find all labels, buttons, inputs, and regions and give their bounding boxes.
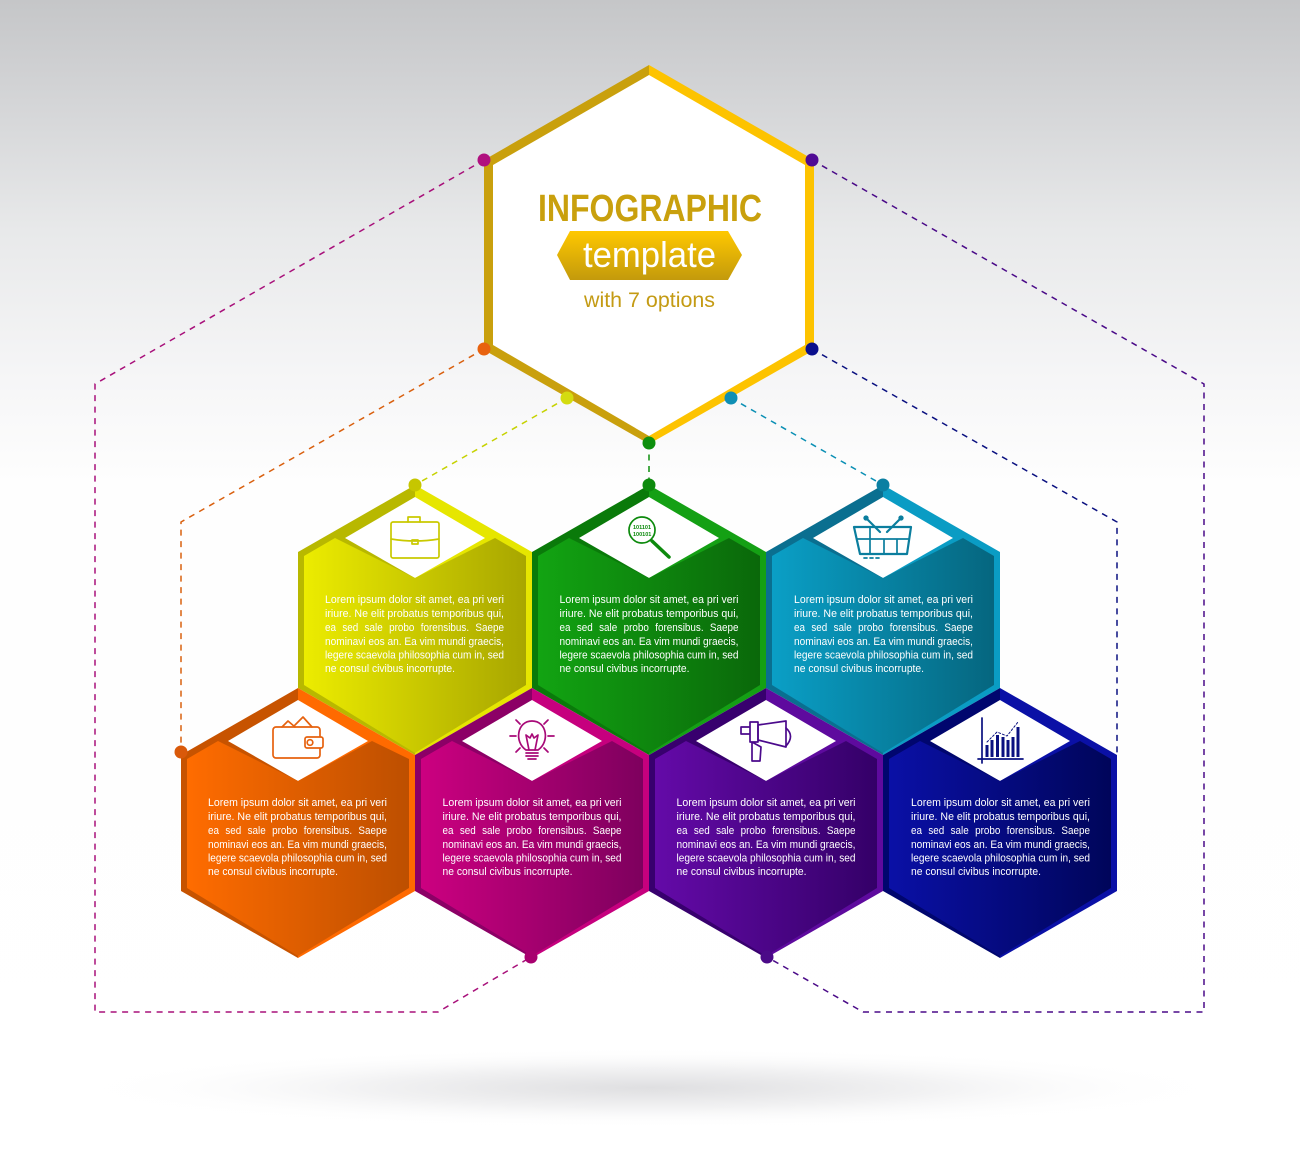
orange text: ea sed sale probo forensibus. Saepe — [208, 825, 387, 837]
icon: light bulb — [510, 720, 554, 759]
panel: navy option — [883, 688, 1117, 958]
dashed connectors — [95, 160, 1204, 1012]
purple text: iriure. Ne elit probatus temporibus qui, — [676, 811, 856, 823]
orange text: legere scaevola philosophia cum in, sed — [208, 852, 387, 864]
purple text: nominavi eos an. Ea vim mundi graecis, — [676, 839, 856, 851]
navy text: ne consul civibus incorrupte. — [911, 866, 1041, 878]
badge text: template — [583, 234, 716, 275]
subtitle: with 7 options — [583, 289, 715, 312]
orange text — [208, 797, 387, 878]
purple text — [676, 797, 856, 878]
floor shadow — [80, 1048, 1220, 1128]
teal text: nominavi eos an. Ea vim mundi graecis, — [794, 636, 973, 648]
icon: basket — [854, 516, 911, 558]
icon: briefcase — [391, 517, 439, 558]
teal text — [794, 594, 973, 675]
badge — [557, 231, 742, 280]
green text: ne consul civibus incorrupte. — [560, 663, 690, 675]
title: INFOGRAPHIC — [538, 188, 762, 230]
green text: iriure. Ne elit probatus temporibus qui, — [560, 608, 738, 620]
green text: nominavi eos an. Ea vim mundi graecis, — [560, 636, 738, 648]
magenta hexagon — [415, 688, 649, 958]
magenta text: ne consul civibus incorrupte. — [442, 866, 572, 878]
panel: purple option — [649, 688, 883, 958]
teal text: ne consul civibus incorrupte. — [794, 663, 924, 675]
orange text: Lorem ipsum dolor sit amet, ea pri veri — [208, 797, 387, 809]
navy text: Lorem ipsum dolor sit amet, ea pri veri — [911, 797, 1090, 809]
teal hexagon — [766, 485, 1000, 755]
orange text: ne consul civibus incorrupte. — [208, 866, 338, 878]
panel: magenta option — [415, 688, 649, 958]
navy hexagon — [883, 688, 1117, 958]
teal text: Lorem ipsum dolor sit amet, ea pri veri — [794, 594, 973, 606]
navy text: nominavi eos an. Ea vim mundi graecis, — [911, 839, 1090, 851]
yellow text: Lorem ipsum dolor sit amet, ea pri veri — [325, 594, 504, 606]
orange text: iriure. Ne elit probatus temporibus qui, — [208, 811, 387, 823]
yellow text — [325, 594, 504, 675]
green text: Lorem ipsum dolor sit amet, ea pri veri — [560, 594, 738, 606]
teal text: legere scaevola philosophia cum in, sed — [794, 650, 973, 662]
connector: orange — [181, 349, 484, 752]
green text — [560, 594, 738, 675]
magenta text: Lorem ipsum dolor sit amet, ea pri veri — [442, 797, 622, 809]
hexagon frame left — [484, 65, 649, 444]
yellow text: ne consul civibus incorrupte. — [325, 663, 455, 675]
navy text: ea sed sale probo forensibus. Saepe — [911, 825, 1090, 837]
orange text: nominavi eos an. Ea vim mundi graecis, — [208, 839, 387, 851]
icon: magnifier: 100101 — [633, 532, 651, 538]
purple text: ne consul civibus incorrupte. — [676, 866, 806, 878]
orange hexagon — [181, 688, 415, 958]
connector dots — [174, 154, 890, 964]
panel: main title hexagon — [484, 65, 814, 444]
connector: green — [648, 443, 650, 485]
icon: wallet — [273, 717, 323, 758]
purple text: Lorem ipsum dolor sit amet, ea pri veri — [676, 797, 856, 809]
teal text: iriure. Ne elit probatus temporibus qui, — [794, 608, 973, 620]
connector: magenta — [95, 160, 531, 1012]
icon: bar chart — [978, 718, 1023, 763]
panel: yellow option — [298, 485, 532, 755]
green hexagon — [532, 485, 766, 755]
icon: magnifier: 101101 — [633, 525, 651, 531]
navy text: legere scaevola philosophia cum in, sed — [911, 852, 1090, 864]
magenta text: legere scaevola philosophia cum in, sed — [442, 852, 622, 864]
navy text — [911, 797, 1090, 878]
hexagon interior — [493, 75, 805, 436]
connector: yellow — [415, 398, 567, 485]
green text: legere scaevola philosophia cum in, sed — [560, 650, 738, 662]
purple text: legere scaevola philosophia cum in, sed — [676, 852, 856, 864]
panel: green option — [532, 485, 766, 755]
connector: navy — [812, 349, 1117, 755]
purple text: ea sed sale probo forensibus. Saepe — [676, 825, 856, 837]
yellow hexagon — [298, 485, 532, 755]
yellow text: nominavi eos an. Ea vim mundi graecis, — [325, 636, 504, 648]
purple hexagon — [649, 688, 883, 958]
teal text: ea sed sale probo forensibus. Saepe — [794, 622, 973, 634]
yellow text: legere scaevola philosophia cum in, sed — [325, 650, 504, 662]
hexagon frame right — [649, 65, 814, 444]
connector: purple — [767, 160, 1204, 1012]
magenta text: ea sed sale probo forensibus. Saepe — [442, 825, 622, 837]
icon: magnifier — [629, 517, 669, 557]
icon: megaphone — [741, 721, 790, 761]
navy text: iriure. Ne elit probatus temporibus qui, — [911, 811, 1090, 823]
green text: ea sed sale probo forensibus. Saepe — [560, 622, 738, 634]
panel: orange option — [181, 688, 415, 958]
magenta text: nominavi eos an. Ea vim mundi graecis, — [442, 839, 622, 851]
magenta text — [442, 797, 622, 878]
yellow text: iriure. Ne elit probatus temporibus qui, — [325, 608, 504, 620]
yellow text: ea sed sale probo forensibus. Saepe — [325, 622, 504, 634]
connector: teal — [731, 398, 883, 485]
magenta text: iriure. Ne elit probatus temporibus qui, — [442, 811, 622, 823]
panel: teal option — [766, 485, 1000, 755]
